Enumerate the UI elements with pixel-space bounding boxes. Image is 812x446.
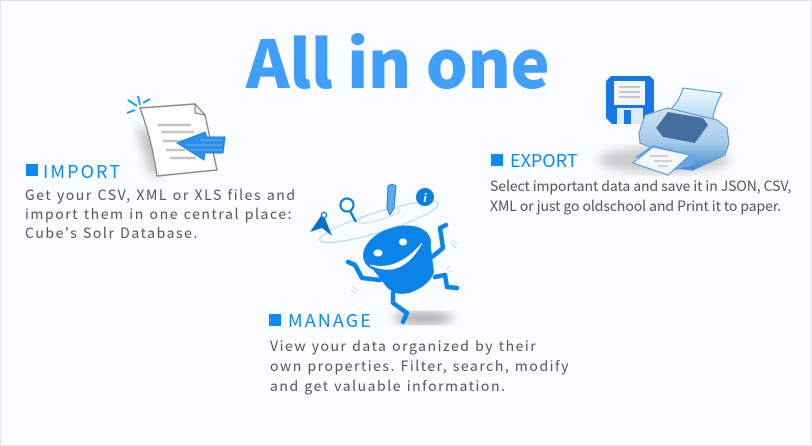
text: manage description	[270, 336, 570, 396]
icon: smiling cube character: i	[423, 190, 427, 205]
text: export description: Select important data and save it in JSON, CSV,	[490, 176, 791, 196]
text: manage description: and get valuable information.	[270, 376, 506, 396]
text: import description: Get your CSV, XML or XLS files and	[25, 185, 297, 205]
text: manage description: own properties. Filter, search, modify	[270, 356, 570, 376]
text: import description: import them in one central place:	[25, 204, 293, 224]
text: manage description: View your data organized by their	[270, 336, 537, 356]
heading: manage: MANAGE	[288, 307, 373, 333]
text: export description: XML or just go oldschool and Print it to paper.	[490, 196, 781, 216]
heading: export: EXPORT	[510, 147, 578, 173]
text: import description	[25, 185, 297, 243]
title: All in one	[246, 12, 550, 108]
heading: import: IMPORT	[43, 158, 122, 184]
text: export description	[490, 176, 791, 216]
text: import description: Cube's Solr Database.	[25, 223, 199, 243]
